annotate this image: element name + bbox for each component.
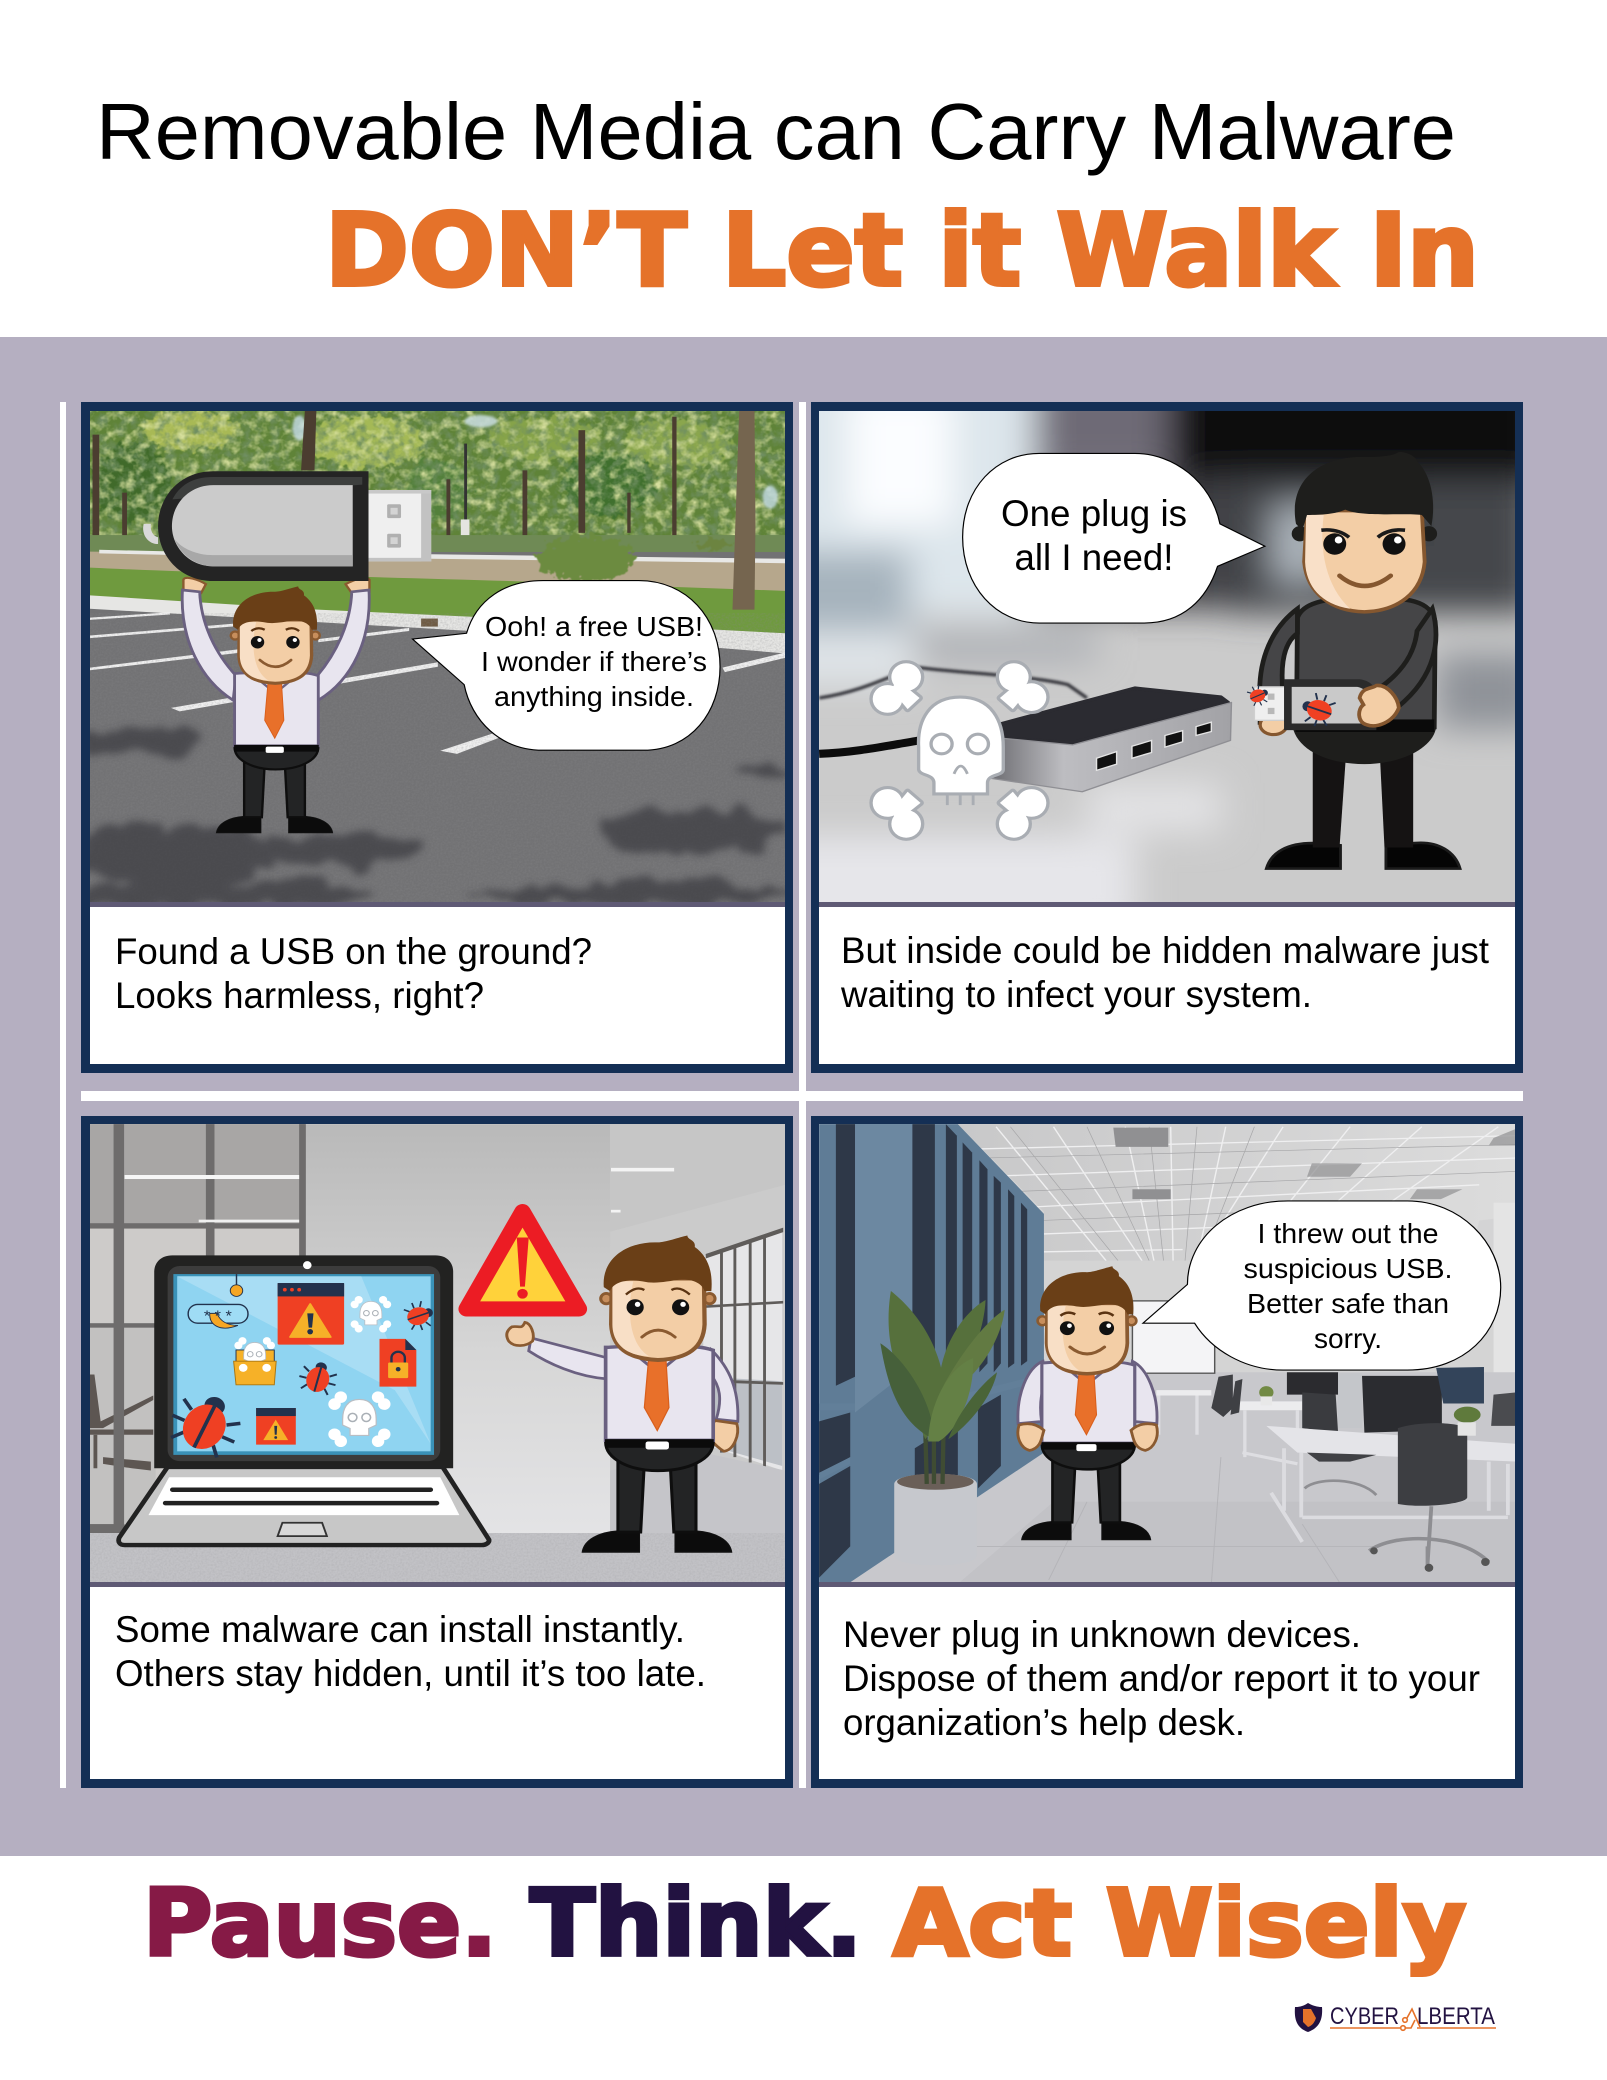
speech text: One plug is [1001, 493, 1187, 534]
scene: office corridor photo [89, 1124, 785, 1582]
screen icon: phishing password hook: * * * [204, 1308, 232, 1324]
caption: Others stay hidden, until it’s too late. [115, 1653, 706, 1694]
office desks and monitors [1156, 1367, 1516, 1572]
man figure [1022, 1266, 1151, 1540]
caption: Never plug in unknown devices. [843, 1614, 1361, 1655]
character art: man holding giant USB [158, 471, 720, 833]
speech text: Better safe than [1247, 1288, 1449, 1319]
white frame lines [60, 402, 1523, 1788]
speech bubble [963, 453, 1265, 623]
lavender background band [0, 337, 1607, 1856]
giant USB drive [158, 471, 431, 581]
caption: organization’s help desk. [843, 1702, 1245, 1743]
speech text [481, 611, 707, 712]
fists [1018, 1424, 1157, 1450]
skull and crossbones [873, 663, 1046, 838]
caption: But inside could be hidden malware just [841, 930, 1490, 971]
scene: parking lot photo [65, 410, 797, 908]
USB hub [991, 688, 1231, 792]
slogan: Pause. Think. Act Wisely: Think. [530, 1870, 862, 1977]
speech text: Ooh! a free USB! [485, 611, 703, 642]
caption [115, 931, 592, 1016]
caption: Dispose of them and/or report it to your [843, 1658, 1480, 1699]
panel 4: man threw out USB in office [811, 1116, 1523, 1788]
worried man [582, 1236, 732, 1552]
character art: confident man with speech bubble [1018, 1201, 1501, 1540]
panel 3: infected laptop and warning [81, 1116, 793, 1788]
panel 2: hacker with infected USB [811, 402, 1523, 1073]
circuit-style orange A and underline [1330, 2009, 1496, 2030]
slogan: Pause. Think. Act Wisely: Act Wisely [893, 1870, 1466, 1977]
speech bubble [1143, 1201, 1501, 1370]
slogan: Pause. Think. Act Wisely [143, 1870, 1466, 1977]
caption: Found a USB on the ground? [115, 931, 592, 972]
screen icon: alert window [278, 1283, 344, 1345]
caption [840, 930, 1490, 1015]
divider under scene [819, 1582, 1515, 1587]
screen icon: infected folder [234, 1337, 276, 1385]
screen icon: phishing password hook [188, 1274, 248, 1328]
title: Removable Media can Carry Malware: Removable Media can Carry Malware [96, 87, 1456, 176]
scene: open office photo [819, 1124, 1516, 1584]
panel 1: found USB in parking lot [65, 402, 797, 1073]
arms at sides [1018, 1361, 1157, 1424]
caption: Some malware can install instantly. [115, 1609, 685, 1650]
screen icon: locked file [380, 1339, 416, 1387]
speech text [1244, 1218, 1452, 1354]
screen icon: small alert window [256, 1408, 296, 1445]
divider under scene [90, 902, 785, 907]
pointing arm [507, 1322, 738, 1451]
speech text: I threw out the [1258, 1218, 1438, 1249]
warning triangle [467, 1212, 579, 1309]
character art: laptop, warning sign, worried man [119, 1212, 738, 1552]
arms raised [182, 578, 369, 700]
laptop [119, 1255, 489, 1545]
divider under scene [819, 902, 1515, 907]
man figure [216, 586, 333, 833]
speech text: suspicious USB. [1244, 1253, 1452, 1284]
speech bubble [413, 581, 720, 750]
speech text: sorry. [1314, 1323, 1382, 1354]
speech text [1001, 493, 1187, 578]
speech text: anything inside. [494, 681, 694, 712]
slogan: Pause. Think. Act Wisely: Pause. [143, 1870, 497, 1977]
hacker figure [1246, 452, 1460, 869]
caption [843, 1614, 1480, 1743]
character art: bubble, skull, hacker [873, 452, 1460, 869]
logo: Cyber Alberta [1295, 2003, 1496, 2032]
potted plant [880, 1291, 1005, 1565]
speech text: I wonder if there’s [481, 646, 707, 677]
scene: blurred desk photo [819, 411, 1515, 902]
divider under scene [90, 1582, 785, 1587]
headline: DON'T Let it Walk In: DON’T Let it Walk In [325, 192, 1479, 309]
logo: Cyber Alberta: LBERTA [1417, 2003, 1495, 2030]
caption: waiting to infect your system. [840, 974, 1312, 1015]
logo: Cyber Alberta: CYBER [1330, 2003, 1399, 2030]
speech text: all I need! [1014, 537, 1174, 578]
icon: shield [1295, 2003, 1322, 2032]
caption [115, 1609, 706, 1694]
caption: Looks harmless, right? [115, 975, 484, 1016]
